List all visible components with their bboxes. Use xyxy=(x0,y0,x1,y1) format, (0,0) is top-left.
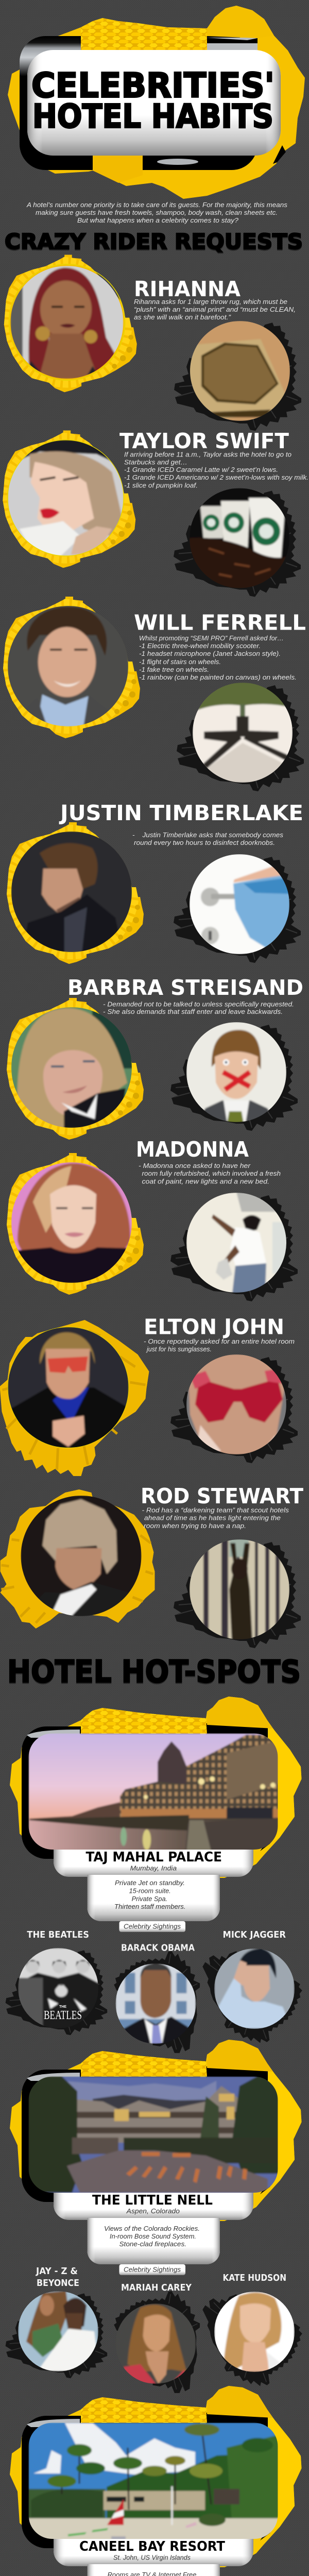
amenities text: Private Jet on standby. xyxy=(115,1879,185,1887)
hotel name: CANEEL BAY RESORT xyxy=(79,2539,225,2554)
panel: Justin Timberlake xyxy=(7,801,303,964)
photo: doorknob xyxy=(189,854,290,955)
description: as she will walk on it barefoot.” xyxy=(134,314,231,321)
photo: gagged man xyxy=(186,1022,287,1123)
name: MARIAH CAREY xyxy=(121,2282,192,2293)
tab: celebrity sightings xyxy=(119,1921,185,1932)
backdrop xyxy=(10,2386,302,2567)
ring xyxy=(3,597,140,738)
panel: Barbra Streisand xyxy=(7,975,303,1140)
intro text: making sure guests have fresh towels, shampoo, body wash, clean sheets etc. xyxy=(36,209,278,216)
hotel name: TAJ MAHAL PALACE xyxy=(85,1850,222,1865)
description: room when trying to have a nap. xyxy=(144,1522,246,1530)
Beatles logo: THE xyxy=(59,2005,66,2009)
panel: Will Ferrell xyxy=(3,597,306,791)
description: -1 rainbow (can be painted on canvas) on wheels. xyxy=(139,674,297,681)
photo: The Little Nell xyxy=(28,2076,279,2195)
name: RIHANNA xyxy=(134,277,241,301)
panel: The Little Nell xyxy=(10,2040,302,2275)
amenities text: Views of the Colorado Rockies. xyxy=(104,2225,200,2232)
photo: Rihanna xyxy=(10,266,124,379)
description: - Rod has a “darkening team” that scout hotels xyxy=(142,1506,289,1514)
description xyxy=(103,1001,294,1015)
name: MADONNA xyxy=(136,1137,249,1162)
amenities text: 15-room suite. xyxy=(129,1888,171,1895)
ring xyxy=(7,822,144,964)
description: ahead of time as he hates light entering the xyxy=(144,1515,281,1522)
photo: Elton John xyxy=(7,1327,129,1448)
panel: Caneel Bay Resort xyxy=(10,2386,302,2576)
description xyxy=(132,832,283,846)
burst xyxy=(184,2267,309,2400)
name: BEYONCE xyxy=(37,2278,79,2289)
photo: tree stand xyxy=(192,682,293,783)
description: just for his sunglasses. xyxy=(146,1346,212,1353)
photo: curtains xyxy=(189,1539,290,1640)
title panel xyxy=(8,6,305,199)
description: - She also demands that staff enter and leave backwards. xyxy=(103,1008,283,1015)
title text: CELEBRITIES' xyxy=(31,66,274,105)
panel: Elton John xyxy=(0,1314,298,1476)
photo: Taj Mahal Palace xyxy=(28,1733,279,1852)
photo: Justin Timberlake xyxy=(11,831,132,953)
name: JUSTIN TIMBERLAKE xyxy=(59,801,303,825)
heading: crazy rider requests: CRAZY RIDER REQUESTS xyxy=(5,229,303,254)
panel: Madonna xyxy=(7,1137,298,1301)
burst xyxy=(6,1950,107,2035)
panel: name plate xyxy=(54,2193,253,2220)
ring xyxy=(3,431,135,568)
description: coat of paint, new lights and a new bed. xyxy=(142,1178,269,1185)
photo: rug xyxy=(188,320,290,421)
amenities text xyxy=(104,2225,200,2248)
location: Mumbay, India xyxy=(130,1865,177,1872)
backdrop xyxy=(10,2040,302,2221)
panel: Mick Jagger xyxy=(202,1931,302,2043)
name: BARACK OBAMA xyxy=(121,1942,195,1954)
tab: celebrity sightings xyxy=(119,2264,185,2275)
panel: amenities xyxy=(88,2218,220,2264)
burst xyxy=(177,685,304,791)
tab label: Celebrity Sightings xyxy=(124,1923,181,1930)
name: TAYLOR SWIFT xyxy=(119,429,289,453)
name: BARBRA STREISAND xyxy=(67,975,303,1000)
panel: Rod Stewart xyxy=(0,1484,303,1648)
panel: Mariah Carey xyxy=(114,2284,200,2393)
description: -1 slice of pumpkin loaf. xyxy=(124,482,198,489)
amenities text xyxy=(114,1879,185,1910)
photo: Mariah Carey xyxy=(115,2303,196,2384)
fringe ring xyxy=(0,1489,154,1629)
panel: Barack Obama xyxy=(114,1944,200,2053)
description: room fully refurbished, which involved a fresh xyxy=(142,1170,281,1177)
photo: Caneel Bay Resort xyxy=(28,2422,279,2541)
intro text: But what happens when a celebrity comes to stay? xyxy=(77,217,238,224)
panel: amenities xyxy=(88,2564,220,2576)
description: - Once reportedly asked for an entire hotel room xyxy=(144,1338,295,1345)
panel: name plate xyxy=(54,1850,253,1877)
Beatles logo: BEATLES xyxy=(44,2009,82,2022)
burst xyxy=(184,1924,309,2057)
tab label: Celebrity Sightings xyxy=(124,2266,181,2274)
burst xyxy=(110,1947,211,2062)
photo: painter xyxy=(186,1192,288,1293)
photo: Starbucks cups xyxy=(189,487,290,588)
description xyxy=(124,451,308,489)
name: THE BEATLES xyxy=(27,1929,89,1940)
photo: The Beatles xyxy=(18,1948,98,2028)
panel: Jay-Z and Beyonce xyxy=(6,2266,107,2378)
photo: Will Ferrell xyxy=(7,605,129,727)
photo: Mick Jagger xyxy=(214,1948,295,2029)
description: Whilst promoting “SEMI PRO” Ferrell asked for… xyxy=(139,635,284,642)
burst xyxy=(170,1195,298,1301)
fringe ring xyxy=(0,1320,149,1476)
description xyxy=(139,1162,281,1185)
description: “plush” with an “animal print” and “must be CLEAN, xyxy=(134,306,296,313)
ring xyxy=(7,1153,144,1295)
description: Starbucks and get… xyxy=(124,459,187,466)
ring xyxy=(7,998,144,1140)
burst xyxy=(174,857,301,963)
description: -1 headset microphone (Janet Jackson style). xyxy=(139,650,281,657)
intro text xyxy=(26,201,287,224)
photo: Barack Obama xyxy=(115,1963,196,2044)
description xyxy=(134,298,296,321)
location: St. John, US Virgin Islands xyxy=(113,2554,191,2562)
photo: Madonna xyxy=(11,1162,132,1283)
photo: Jay-Z and Beyonce xyxy=(18,2291,98,2371)
panel: Rihanna xyxy=(4,255,301,431)
description: round every two hours to disinfect doorknobs. xyxy=(134,839,275,846)
description xyxy=(142,1506,289,1530)
panel: Taj Mahal Palace xyxy=(10,1697,302,1932)
burst xyxy=(110,2287,211,2402)
name: ELTON JOHN xyxy=(144,1314,284,1339)
photo: Rod Stewart xyxy=(21,1495,142,1617)
burst xyxy=(6,2293,107,2378)
name: JAY - Z & xyxy=(35,2266,78,2277)
hotel name: THE LITTLE NELL xyxy=(92,2193,213,2208)
burst xyxy=(174,1542,301,1648)
amenities text: In-room Bose Sound System. xyxy=(110,2233,196,2240)
Beatles logo xyxy=(44,2005,81,2019)
panel: name plate xyxy=(54,2539,253,2566)
description: -1 fake tree on wheels. xyxy=(139,666,209,673)
amenities text: Private Spa. xyxy=(132,1895,167,1903)
name: KATE HUDSON xyxy=(222,2273,286,2283)
ring xyxy=(4,255,137,392)
description: -1 flight of stairs on wheels. xyxy=(139,658,221,666)
description: - Demanded not to be talked to unless specifically requested. xyxy=(103,1001,294,1008)
photo: Kate Hudson xyxy=(214,2292,295,2372)
panel: Taylor Swift xyxy=(3,429,308,597)
description: Rihanna asks for 1 large throw rug, which must be xyxy=(134,298,287,306)
description: - Madonna once asked to have her xyxy=(139,1162,251,1170)
name: WILL FERRELL xyxy=(134,610,306,635)
panel: Kate Hudson xyxy=(202,2274,302,2386)
location: Aspen, Colorado xyxy=(126,2208,180,2215)
title text xyxy=(31,66,274,135)
name xyxy=(35,2266,79,2289)
panel: amenities xyxy=(88,1875,220,1921)
photo: sunglasses xyxy=(186,1354,287,1455)
description xyxy=(139,635,297,681)
burst xyxy=(174,490,301,597)
description: If arriving before 11 a.m., Taylor asks the hotel to go to xyxy=(124,451,291,459)
amenities text: Thirteen staff members. xyxy=(114,1903,185,1910)
description xyxy=(144,1338,295,1353)
description: -1 Grande ICED Americano w/ 2 sweet’n-lows with soy milk. xyxy=(124,474,308,481)
name: MICK JAGGER xyxy=(222,1929,286,1940)
panel: The Beatles xyxy=(6,1929,107,2035)
burst xyxy=(170,1025,298,1131)
photo: Taylor Swift xyxy=(7,440,124,556)
name: ROD STEWART xyxy=(141,1484,303,1509)
backdrop xyxy=(10,1697,302,1878)
description: - Justin Timberlake asks that somebody comes xyxy=(132,832,283,839)
amenities text: Stone-clad fireplaces. xyxy=(119,2241,186,2248)
description: -1 Grande ICED Caramel Latte w/ 2 sweet’n lows. xyxy=(124,466,278,473)
intro text: A hotel’s number one priority is to take care of its guests. For the majority, this means xyxy=(26,201,287,209)
burst xyxy=(170,1357,298,1463)
burst xyxy=(174,323,301,431)
photo: Barbra Streisand xyxy=(11,1007,132,1128)
title text: HOTEL HABITS xyxy=(32,98,273,135)
description: -1 Electric three-wheel mobility scooter. xyxy=(139,642,261,650)
